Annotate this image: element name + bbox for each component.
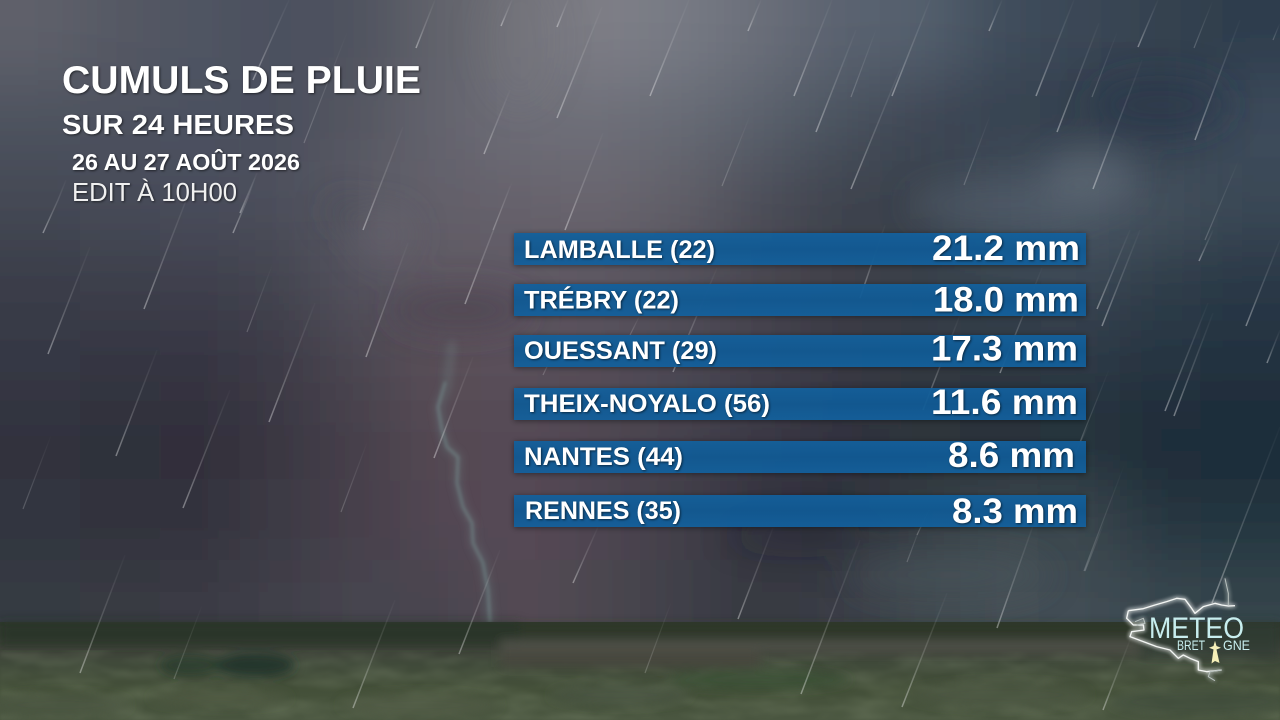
background: grass field and horizon: [0, 622, 1280, 720]
logo wordmark: GNE: GNE: [1223, 637, 1250, 653]
row: Theix-Noyalo: [514, 383, 1086, 422]
row: Trébry: [514, 280, 1086, 320]
logo wordmark: BRET: BRET: [1177, 637, 1205, 653]
logo wordmark: METEO: METEO: [1149, 612, 1244, 645]
row: Ouessant: [514, 330, 1086, 368]
logo: Meteo Bretagne: [1127, 578, 1250, 681]
row: Nantes: 8.6 mm: [948, 436, 1075, 475]
row: Ouessant: 17.3 mm: [931, 330, 1078, 368]
row: Theix-Noyalo: 11.6 mm: [931, 383, 1078, 422]
icon: ermine: [1209, 641, 1221, 664]
background: lightning bolt: [438, 345, 490, 622]
subtitle: SUR 24 HEURES: [62, 109, 294, 140]
row: Lamballe: [514, 229, 1086, 268]
row: Theix-Noyalo: THEIX-NOYALO (56): [524, 390, 770, 418]
date range: 26 AU 27 AOÛT 2026: [72, 148, 300, 175]
row: Rennes: RENNES (35): [525, 497, 681, 525]
edit time: EDIT À 10H00: [72, 177, 237, 207]
icon: Brittany outline: [1127, 578, 1235, 681]
row: Nantes: [514, 436, 1086, 475]
row: Nantes: NANTES (44): [524, 443, 683, 471]
row: Trébry: 18.0 mm: [933, 280, 1079, 320]
row: Lamballe: 21.2 mm: [932, 229, 1080, 268]
title block: [62, 59, 421, 207]
title: CUMULS DE PLUIE: [62, 59, 421, 102]
background: cloud details: [327, 0, 1230, 597]
row: Lamballe: LAMBALLE (22): [524, 236, 715, 264]
row: Rennes: [514, 492, 1086, 531]
row: Rennes: 8.3 mm: [952, 492, 1078, 531]
row: Ouessant: OUESSANT (29): [524, 337, 717, 365]
row: Trébry: TRÉBRY (22): [524, 286, 679, 314]
rainfall ranking list: [514, 229, 1086, 531]
